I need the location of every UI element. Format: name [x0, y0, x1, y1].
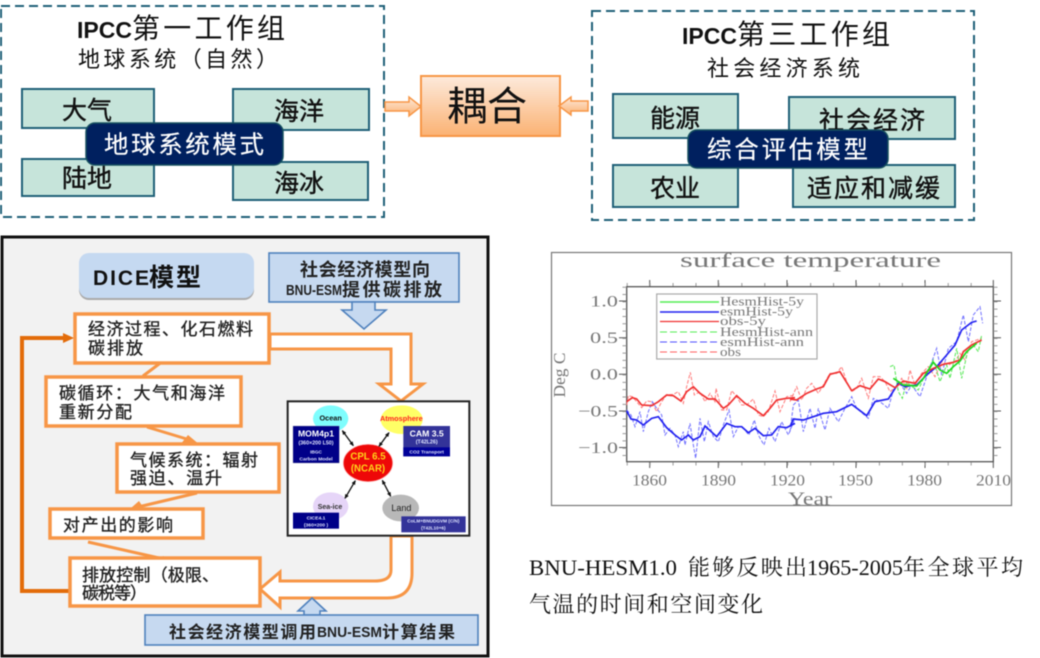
box: carbon cycle: 重新分配 [59, 403, 132, 422]
box: energy: 能源 [650, 105, 700, 133]
arrow: group 1 to coupling [385, 97, 421, 116]
box: climate system [117, 444, 279, 492]
legend: HesmHist-ann [720, 325, 814, 339]
panel: DICE model [2, 237, 488, 656]
component: CPL coupler: CPL 6.5 [350, 452, 386, 463]
x-axis labels [632, 472, 1011, 490]
arrow: callout up [298, 598, 326, 615]
component: land: Land [391, 503, 411, 513]
box: adaptation and mitigation [793, 165, 955, 207]
arrows: coupler links [342, 431, 391, 498]
box: impact on output [50, 509, 203, 538]
arrow: carbon cycle to climate [147, 427, 197, 442]
box: land: 陆地 [62, 165, 112, 193]
heading: DICE model [79, 253, 254, 300]
x-axis labels: 1920 [770, 472, 805, 490]
label: CICE4.1 [293, 513, 339, 529]
arrow: hollow to coupled model [270, 334, 423, 401]
heading: DICE model: 模型 [149, 264, 201, 292]
label: integrated assessment model [688, 130, 888, 168]
box: economy and emissions: 碳排放 [88, 339, 143, 358]
box: ocean [233, 89, 369, 130]
box: economy and emissions: 经济过程、化石燃料 [88, 320, 253, 339]
plot axes [619, 280, 1001, 468]
label: MOM4p1: Carbon Model [299, 456, 333, 462]
arrow: callout down [342, 302, 386, 329]
box: carbon cycle [46, 377, 241, 426]
label: CoLM [401, 516, 466, 532]
box: land [22, 159, 154, 196]
legend: obs-5y [720, 314, 767, 328]
chart title: surface temperature [680, 250, 941, 272]
caption [529, 555, 1023, 617]
callout: model uses BNU-ESM results: 计算结果 [382, 622, 455, 642]
y-axis title: Deg C [550, 352, 569, 398]
heading: DICE model: DICE [93, 267, 149, 290]
caption: 气温的时间和空间变化 [529, 592, 763, 617]
data series, left half [627, 372, 795, 458]
arrow: impact to emission control [88, 542, 176, 563]
callout: emissions provided to BNU-ESM: BNU-ESM [286, 282, 342, 299]
label: MOM4p1: (360×200 L50) [298, 440, 334, 446]
box: sea ice [233, 162, 368, 200]
caption: 1965-2005 [807, 555, 903, 580]
box: ocean: 海洋 [274, 98, 324, 126]
component: ocean [313, 405, 348, 432]
arrow: climate to impact [131, 493, 197, 508]
label: MOM4p1: IBGC [310, 449, 322, 454]
legend: obs [720, 345, 741, 359]
legend: esmHist-5y [720, 304, 794, 318]
box: climate system: 强迫、温升 [130, 469, 222, 488]
label: CAM 3.5: CAM 3.5 [410, 428, 444, 438]
label: CAM 3.5: CO2 Transport [409, 450, 444, 456]
callout: emissions provided to BNU-ESM [269, 253, 459, 302]
caption: 年全球平均 [903, 555, 1023, 580]
callout: model uses BNU-ESM results [145, 615, 478, 645]
legend: esmHist-ann [720, 335, 805, 349]
box: socio-economy: 社会经济 [819, 107, 925, 135]
box: agriculture [613, 165, 738, 207]
x-axis labels: 1860 [632, 472, 667, 490]
subheading: earth system: 地球系统（自然） [78, 47, 278, 72]
box: atmosphere [22, 89, 154, 128]
label: earth system model [86, 123, 283, 165]
component: land [382, 495, 419, 521]
label: CICE4.1: CICE4.1 [307, 516, 326, 522]
caption: 能够反映出 [688, 555, 807, 580]
box: emission control [70, 558, 260, 606]
box: economy and emissions [75, 314, 269, 363]
caption: BNU-HESM1.0 [529, 555, 677, 580]
callout: emissions provided to BNU-ESM: 社会经济模型向 [300, 259, 430, 280]
y-axis labels: 0.5 [590, 330, 618, 347]
box: impact on output: 对产出的影响 [63, 516, 173, 535]
box: socio-economy [789, 97, 955, 139]
box: adaptation and mitigation: 适应和减缓 [807, 175, 940, 203]
component: atmosphere: Atmosphere [380, 414, 423, 423]
y-axis labels: 1.0 [590, 294, 618, 310]
box: climate system: 气候系统：辐射 [130, 451, 258, 470]
arrow: economy to carbon cycle [143, 361, 163, 376]
x-axis labels: 2010 [976, 472, 1011, 490]
component: atmosphere [380, 405, 423, 434]
label: CICE4.1: (360×200 ) [304, 522, 328, 528]
arrow: hollow back to emission control [260, 536, 412, 607]
label: CoLM: (T42L10+6) [421, 526, 446, 531]
label: MOM4p1 [293, 426, 339, 463]
y-axis labels: −0.5 [578, 404, 618, 420]
component: CPL coupler [343, 444, 393, 482]
box: carbon cycle: 碳循环：大气和海洋 [59, 384, 225, 403]
callout: model uses BNU-ESM results: BNU-ESM [317, 624, 382, 641]
box: coupling [421, 76, 560, 136]
callout: model uses BNU-ESM results: 社会经济模型调用 [169, 622, 316, 642]
box: energy [613, 94, 738, 138]
box: atmosphere: 大气 [62, 97, 112, 125]
callout: emissions provided to BNU-ESM: 提供碳排放 [342, 279, 442, 300]
label: earth system model: 地球系统模式 [104, 131, 264, 159]
heading: working group 3: IPCC [682, 23, 737, 49]
subheading: socio-economic system: 社会经济系统 [707, 56, 860, 81]
x-axis title: Year [788, 489, 833, 510]
y-axis labels: 0.0 [590, 366, 618, 384]
x-axis labels: 1950 [838, 472, 873, 490]
box: emission control: 排放控制（极限、 [82, 566, 219, 585]
component: sea ice [313, 492, 348, 520]
diagram: BNU-ESM coupled model [288, 401, 469, 536]
label: CAM 3.5 [403, 426, 450, 456]
legend [657, 294, 817, 359]
label: MOM4p1: MOM4p1 [298, 428, 334, 438]
box: sea ice: 海冰 [274, 170, 324, 198]
label: CoLM: CoLM+BNUDGVM (C/N) [407, 519, 460, 524]
arrow: group 3 to coupling [559, 97, 588, 115]
component: ocean: Ocean [319, 414, 342, 423]
heading: working group 1: 第一工作组 [132, 13, 285, 44]
arrow: feedback loop [22, 333, 74, 591]
label: integrated assessment model: 综合评估模型 [707, 136, 868, 164]
x-axis labels: 1890 [701, 472, 736, 490]
component: CPL coupler: (NCAR) [351, 463, 385, 474]
legend: HesmHist-5y [720, 294, 805, 308]
box: coupling: 耦合 [447, 85, 527, 129]
heading: working group 1: IPCC [77, 17, 132, 43]
heading: working group 3: 第三工作组 [737, 19, 890, 50]
box: agriculture: 农业 [650, 175, 700, 203]
label: CAM 3.5: (T42L26) [416, 440, 438, 446]
box: emission control: 碳税等） [82, 584, 147, 603]
chart: surface temperature [550, 250, 1012, 510]
data series, right half [790, 307, 983, 432]
panel: IPCC working group 1 [1, 6, 384, 217]
panel: IPCC working group 3 [592, 11, 974, 220]
y-axis labels: −1.0 [578, 440, 618, 457]
y-axis labels [578, 294, 618, 457]
x-axis labels: 1980 [907, 472, 942, 490]
component: sea ice: Sea-ice [318, 504, 342, 511]
